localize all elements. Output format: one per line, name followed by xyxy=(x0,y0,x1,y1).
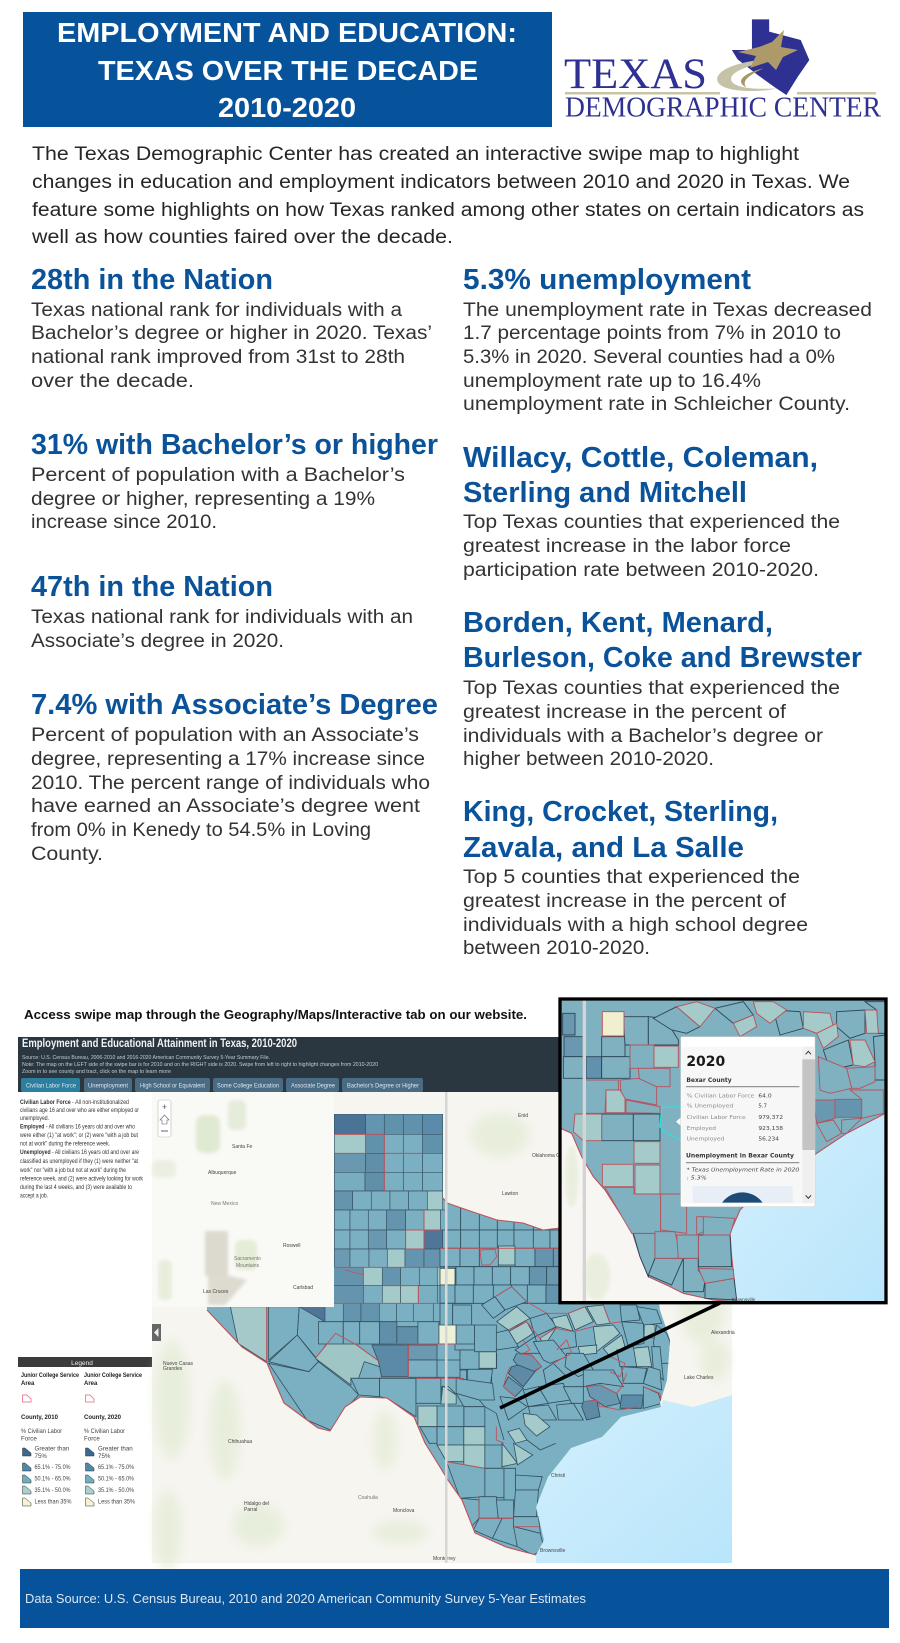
highlight: 47th in the Nation xyxy=(31,571,413,652)
legend: County, 2020 xyxy=(84,1415,122,1421)
popup card: Civilian Labor Force xyxy=(687,1115,746,1121)
popup card: 64.0 xyxy=(758,1093,772,1099)
west and south Texas counties xyxy=(230,1307,556,1555)
swipe map screenshot xyxy=(18,1037,735,1570)
highlight: Willacy, Cottle, Coleman, Sterling and Mitchell: Sterling and Mitchell xyxy=(463,477,747,509)
title banner: 2010-2020 xyxy=(218,92,356,123)
highlight: 5.3% unemployment xyxy=(463,264,872,415)
map header bar: High School or Equivalent xyxy=(140,1082,205,1090)
Texas county choropleth xyxy=(200,1110,680,1565)
highlight: 5.3% unemployment: 5.3% unemployment xyxy=(463,264,751,296)
intro paragraph: well as how counties faired over the decade. xyxy=(31,227,453,248)
popup card xyxy=(676,1036,816,1207)
definitions text panel: reference week, and (2) were actively looking for work xyxy=(20,1176,144,1182)
popup card: % Civilian Labor Force xyxy=(687,1093,754,1099)
highlight: 31% with Bachelor's or higher: degree or higher, representing a 19% xyxy=(31,489,375,510)
definitions text panel: during the last 4 weeks, and (3) were available to xyxy=(20,1184,132,1191)
swipe bar xyxy=(445,1092,448,1563)
definitions text panel xyxy=(19,1099,144,1200)
legend: Greater than xyxy=(34,1446,70,1452)
legend: Area xyxy=(21,1381,35,1387)
New Mexico overlay map: Carlsbad xyxy=(293,1285,313,1291)
map header bar: Note: The map on the LEFT side of the swipe bar is for 2010 and on the RIGHT side is 2020. Swipe from left to right to highlight changes from 2010-2020 xyxy=(22,1062,378,1068)
legend: County, 2010 xyxy=(21,1415,59,1421)
map zoom controls: + xyxy=(162,1102,167,1112)
highlight: 28th in the Nation: Texas national rank for individuals with a xyxy=(31,300,402,321)
New Mexico overlay map: Roswell xyxy=(283,1243,301,1249)
legend: Less than 35% xyxy=(34,1498,72,1506)
definitions text panel: unemployed. xyxy=(20,1115,49,1122)
highlight: King, Crocket, Sterling, Zavala, and La Salle: King, Crocket, Sterling, xyxy=(463,796,778,828)
highlight: Willacy, Cottle, Coleman, Sterling and Mitchell: Top Texas counties that experienced the xyxy=(463,512,840,533)
intro paragraph: feature some highlights on how Texas ranked among other states on certain indicators as xyxy=(32,200,864,221)
highlight: Borden, Kent, Menard, Burleson, Coke and Brewster xyxy=(463,607,862,770)
definitions text panel: accept a job. xyxy=(20,1192,48,1200)
popup card: 979,372 xyxy=(758,1115,783,1121)
intro paragraph: The Texas Demographic Center has created an interactive swipe map to highlight xyxy=(32,144,800,165)
popup card: Employed xyxy=(687,1126,716,1132)
Bexar County highlight xyxy=(660,1107,683,1140)
data source bar xyxy=(20,1569,889,1628)
highlight: 5.3% unemployment: unemployment rate in Schleicher County. xyxy=(463,394,850,415)
highlight: King, Crocket, Sterling, Zavala, and La Salle xyxy=(463,796,808,959)
inset counties with red borders xyxy=(573,1002,883,1283)
map place labels: Chihuahua xyxy=(228,1439,252,1445)
definitions text panel: Employed - All civilians 16 years old and over who xyxy=(20,1124,135,1130)
New Mexico overlay map: Santa Fe xyxy=(232,1144,253,1150)
map place labels: Alexandria xyxy=(711,1330,735,1336)
popup card: Bexar County xyxy=(686,1078,732,1084)
highlight: 7.4% with Associate's Degree xyxy=(31,689,438,865)
definitions text panel: classified as unemployed if they (1) were neither "at xyxy=(20,1158,138,1165)
map place labels: Monterrey xyxy=(433,1556,456,1562)
highlight: 5.3% unemployment: 5.3% in 2020. Several counties had a 0% xyxy=(463,347,835,368)
popup card: : 5.3% xyxy=(687,1175,707,1181)
legend: Area xyxy=(84,1381,98,1387)
legend: Force xyxy=(84,1436,100,1442)
intro paragraph: changes in education and employment indicators between 2010 and 2020 in Texas. We xyxy=(32,172,850,193)
inset: zoomed county map with popup xyxy=(559,998,887,1303)
definitions text panel: Civilian Labor Force - All non-institutionalized xyxy=(20,1099,129,1106)
highlight: 28th in the Nation: over the decade. xyxy=(31,371,194,392)
map header bar: Some College Education xyxy=(217,1082,280,1090)
inset Texas fill xyxy=(561,1000,885,1302)
map header bar: Source: U.S. Census Bureau, 2006-2010 and 2016-2020 American Community Survey 5-Year Summary File. xyxy=(22,1055,270,1061)
legend: Greater than xyxy=(98,1446,133,1452)
popup card: 56,234 xyxy=(758,1137,779,1143)
popup card: Unemployed xyxy=(687,1137,724,1143)
highlight: Borden, Kent, Menard, Burleson, Coke and Brewster: Top Texas counties that experienced the xyxy=(463,678,840,699)
map header bar: Civilian Labor Force xyxy=(26,1082,77,1090)
map place labels: Parral xyxy=(244,1507,257,1513)
popup card: 5.7 xyxy=(758,1104,767,1110)
highlight: Willacy, Cottle, Coleman, Sterling and Mitchell xyxy=(463,442,840,581)
map header bar xyxy=(18,1037,732,1092)
map place labels: Christi xyxy=(551,1473,565,1479)
definitions text panel: work" nor "with a job but not at work" during the xyxy=(19,1167,126,1174)
map header bar: Associate Degree xyxy=(291,1082,335,1090)
highlight: King, Crocket, Sterling, Zavala, and La Salle: Zavala, and La Salle xyxy=(463,832,744,864)
highlight: 28th in the Nation: national rank improved from 31st to 28th xyxy=(31,347,405,368)
highlight: Willacy, Cottle, Coleman, Sterling and Mitchell: participation rate between 2010-2020. xyxy=(463,560,819,581)
basemap xyxy=(152,1092,732,1570)
map place labels: Lake Charles xyxy=(684,1375,714,1381)
panhandle and west-central county grid xyxy=(300,1114,473,1322)
highlight: King, Crocket, Sterling, Zavala, and La Salle: between 2010-2020. xyxy=(463,938,650,959)
map place labels: Coahuila xyxy=(358,1495,378,1501)
highlight: 31% with Bachelor's or higher: increase since 2010. xyxy=(31,512,217,533)
map place labels: Enid xyxy=(518,1113,528,1119)
Brownsville label: Brownsville xyxy=(732,1297,756,1302)
highlight: 47th in the Nation: Associate’s degree in 2020. xyxy=(31,631,284,652)
legend: % Civilian Labor xyxy=(84,1428,125,1435)
Texas outline xyxy=(443,1198,560,1230)
New Mexico overlay map: Las Cruces xyxy=(203,1289,229,1295)
definitions text panel: civilians age 16 and over who are either employed or xyxy=(20,1107,140,1114)
map place labels: Monclova xyxy=(393,1508,415,1514)
New Mexico overlay map: Sacramento xyxy=(234,1256,261,1262)
Rio Grande and coast border xyxy=(207,1310,536,1555)
inset frame xyxy=(560,999,886,1303)
highlight: 28th in the Nation: Bachelor’s degree or higher in 2020. Texas’ xyxy=(31,323,432,344)
highlight: 7.4% with Associate's Degree: County. xyxy=(31,844,103,865)
legend: Less than 35% xyxy=(98,1498,135,1506)
north and central county cells xyxy=(440,1197,670,1420)
legend: 75% xyxy=(98,1453,111,1460)
title banner: EMPLOYMENT AND EDUCATION: xyxy=(57,17,517,48)
highlight: 5.3% unemployment: The unemployment rate in Texas decreased xyxy=(463,300,872,321)
highlight: 7.4% with Associate's Degree: have earned an Associate’s degree went xyxy=(31,796,421,817)
leader line from Bexar County to inset xyxy=(500,1303,720,1408)
map place labels: Brownsville xyxy=(540,1548,566,1554)
legend: 50.1% - 65.0% xyxy=(34,1476,71,1482)
legend: 35.1% - 50.0% xyxy=(34,1487,71,1494)
definitions text panel: not at work" during the reference week. xyxy=(20,1140,110,1148)
inset gulf xyxy=(730,1113,885,1302)
highlight: Borden, Kent, Menard, Burleson, Coke and Brewster: Burleson, Coke and Brewster xyxy=(463,642,862,674)
map header bar: Bachelor's Degree or Higher xyxy=(347,1082,419,1090)
map zoom controls xyxy=(158,1100,171,1137)
highlight: 47th in the Nation: Texas national rank for individuals with an xyxy=(31,607,413,628)
New Mexico overlay map: Albuquerque xyxy=(208,1170,237,1176)
map header bar: Employment and Educational Attainment in Texas, 2010-2020 xyxy=(22,1038,297,1050)
popup card: 2020 xyxy=(686,1054,726,1070)
highlight: 31% with Bachelor's or higher: Percent of population with a Bachelor’s xyxy=(31,465,405,486)
legend: 75% xyxy=(34,1453,47,1460)
legend: 65.1% - 75.0% xyxy=(34,1464,71,1471)
swipe map access note: Access swipe map through the Geography/Maps/Interactive tab on our website. xyxy=(24,1008,527,1022)
data source bar: Data Source: U.S. Census Bureau, 2010 and 2020 American Community Survey 5-Year Estimates xyxy=(25,1591,586,1606)
highlight: 7.4% with Associate's Degree: from 0% in Kenedy to 54.5% in Loving xyxy=(31,820,371,841)
legend: Force xyxy=(21,1436,37,1442)
highlight: 31% with Bachelor's or higher: 31% with Bachelor’s or higher xyxy=(31,429,438,461)
popup card: % Unemployed xyxy=(687,1104,733,1110)
highlight: Willacy, Cottle, Coleman, Sterling and Mitchell: Willacy, Cottle, Coleman, xyxy=(463,442,818,474)
inset counties with dark borders xyxy=(563,1002,885,1300)
intro paragraph xyxy=(31,144,864,248)
highlight: 7.4% with Associate's Degree: 2010. The percent range of individuals who xyxy=(31,773,430,794)
highlight: Borden, Kent, Menard, Burleson, Coke and Brewster: greatest increase in the percent of xyxy=(463,702,787,723)
map place labels: Hidalgo del xyxy=(244,1501,269,1507)
highlight: Borden, Kent, Menard, Burleson, Coke and Brewster: Borden, Kent, Menard, xyxy=(463,607,773,639)
inset Mexico border region xyxy=(565,1147,610,1300)
logo: Texas Demographic Center: TEXAS xyxy=(564,51,707,98)
highlight: 5.3% unemployment: 1.7 percentage points from 7% in 2010 to xyxy=(463,323,841,344)
highlight: Willacy, Cottle, Coleman, Sterling and Mitchell: greatest increase in the labor force xyxy=(463,536,791,557)
highlight: 7.4% with Associate's Degree: Percent of population with an Associate’s xyxy=(31,725,419,746)
definitions text panel: were either (1) "at work"; or (2) were "with a job but xyxy=(19,1132,138,1139)
map header bar: Zoom in to see county and tract, click on the map to learn more xyxy=(22,1069,171,1075)
legend xyxy=(18,1357,152,1506)
highlight: Borden, Kent, Menard, Burleson, Coke and Brewster: individuals with a Bachelor’s degree or xyxy=(463,726,824,747)
highlight: 47th in the Nation: 47th in the Nation xyxy=(31,571,273,603)
logo: Texas Demographic Center xyxy=(564,19,881,124)
legend: % Civilian Labor xyxy=(21,1428,62,1435)
legend: Junior College Service xyxy=(21,1373,80,1379)
highlight: 28th in the Nation xyxy=(31,264,432,392)
title banner xyxy=(23,12,552,127)
highlight: 7.4% with Associate's Degree: degree, representing a 17% increase since xyxy=(31,749,425,770)
legend: 35.1% - 50.0% xyxy=(98,1487,134,1494)
popup card: 923,138 xyxy=(758,1126,783,1132)
New Mexico overlay map xyxy=(152,1092,334,1307)
inset swipe bar xyxy=(583,1000,586,1302)
highlight: Borden, Kent, Menard, Burleson, Coke and Brewster: higher between 2010-2020. xyxy=(463,749,714,770)
logo: Texas Demographic Center: DEMOGRAPHIC CENTER xyxy=(565,92,881,124)
legend: 65.1% - 75.0% xyxy=(98,1464,134,1471)
definitions text panel: Unemployed - All civilians 16 years old and over are xyxy=(20,1149,139,1156)
New Mexico overlay map: Mountains xyxy=(236,1263,260,1269)
legend: Legend xyxy=(71,1360,93,1367)
map place labels: Oklahoma City xyxy=(532,1153,565,1159)
popup card: Unemployment in Bexar County xyxy=(686,1154,794,1160)
map place labels: Nuevo Casas xyxy=(163,1361,194,1367)
highlight: 28th in the Nation: 28th in the Nation xyxy=(31,264,273,296)
highlight: King, Crocket, Sterling, Zavala, and La Salle: individuals with a high school degree xyxy=(463,915,808,936)
map header bar: Unemployment xyxy=(88,1082,128,1090)
popup card: * Texas Unemployment Rate in 2020 xyxy=(687,1168,800,1174)
map place labels: Lawton xyxy=(502,1191,518,1197)
legend: Junior College Service xyxy=(84,1373,143,1379)
New Mexico overlay map: New Mexico xyxy=(211,1201,238,1207)
highlight: 31% with Bachelor's or higher xyxy=(31,429,438,533)
map place labels: Grandes xyxy=(163,1366,183,1372)
legend: 50.1% - 65.0% xyxy=(98,1476,134,1482)
highlight: 7.4% with Associate's Degree: 7.4% with Associate’s Degree xyxy=(31,689,438,721)
highlight: King, Crocket, Sterling, Zavala, and La Salle: greatest increase in the percent of xyxy=(463,891,787,912)
swipe handle arrow xyxy=(152,1324,161,1341)
highlight: 5.3% unemployment: unemployment rate up to 16.4% xyxy=(463,371,761,392)
highlight: King, Crocket, Sterling, Zavala, and La Salle: Top 5 counties that experienced the xyxy=(463,867,800,888)
map place labels xyxy=(163,1113,735,1562)
title banner: TEXAS OVER THE DECADE xyxy=(98,55,478,86)
